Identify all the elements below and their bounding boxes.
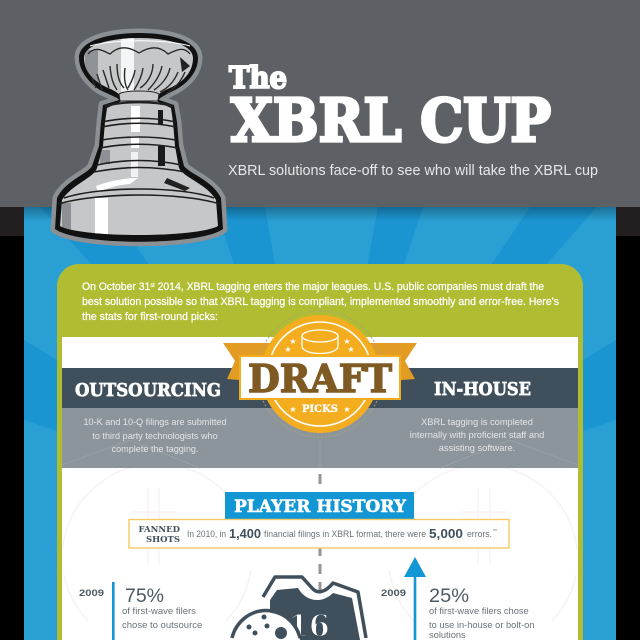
intro text: st — [150, 283, 155, 289]
stars — [284, 337, 355, 354]
stat: 25 percent: solutions — [429, 630, 466, 640]
outsourcing description — [83, 417, 227, 454]
intro text: the stats for first-round picks: — [82, 311, 218, 323]
in-house description — [410, 417, 544, 453]
heading: player history: PLAYER HISTORY — [234, 497, 407, 517]
callout: fanned shots: In 2010, in — [187, 529, 226, 540]
title: The — [229, 61, 287, 96]
ribbon tails — [223, 343, 417, 382]
stars: ★ — [347, 345, 355, 354]
in-house description: internally with proficient staff and — [410, 430, 544, 440]
puck — [302, 330, 338, 354]
callout: fanned shots: 1,400 — [229, 526, 261, 541]
heading: in-house: IN-HOUSE — [434, 380, 531, 400]
title — [229, 61, 551, 155]
arrow: right blue — [404, 557, 426, 640]
blue ray background — [24, 207, 616, 640]
stat: 25 percent: 2009 — [381, 588, 406, 599]
outsourcing description: to third party technologists who — [92, 431, 218, 441]
outsourcing description: complete the tagging. — [112, 444, 198, 454]
stat: 75 percent: 2009 — [79, 588, 104, 599]
band: dark heading — [62, 368, 578, 408]
picks word: ★ — [343, 405, 351, 414]
icon: silver trophy cup — [55, 33, 223, 242]
dark side strips — [0, 207, 640, 236]
badge: draft picks — [223, 311, 417, 437]
icon: jersey and puck — [232, 577, 366, 640]
stat: 75 percent — [79, 586, 202, 631]
callout: fanned shots: ** — [493, 529, 497, 535]
band: gray description — [62, 408, 578, 468]
subtitle: XBRL solutions face-off to see who will take the XBRL cup — [228, 163, 598, 179]
stat: 25 percent: 25% — [429, 586, 469, 607]
draft word: DRAFT — [248, 356, 392, 401]
stat: 25 percent: to use in-house or bolt-on — [429, 620, 534, 630]
heading: player history — [225, 492, 414, 519]
stat: 75 percent: of first-wave filers — [122, 606, 196, 617]
heading: outsourcing: OUTSOURCING — [75, 381, 221, 401]
title: XBRL CUP — [231, 86, 551, 155]
header band — [0, 0, 640, 207]
stars: ★ — [284, 345, 292, 354]
stat: 25 percent — [381, 586, 534, 640]
outsourcing description: 10-K and 10-Q filings are submitted — [83, 417, 227, 427]
callout: fanned shots: financial filings in XBRL format, there were — [264, 529, 426, 540]
dashed center line — [318, 474, 322, 592]
badge circle — [257, 311, 383, 437]
picks word: ★ — [289, 405, 297, 414]
panel: green intro — [57, 264, 583, 640]
callout: fanned shots: 5,000 — [429, 526, 463, 541]
stat: 25 percent: of first-wave filers chose — [429, 606, 529, 616]
intro text — [82, 281, 559, 323]
rink markings — [62, 464, 577, 621]
picks word — [289, 404, 351, 415]
stars: ★ — [289, 337, 297, 346]
callout: fanned shots: errors. — [467, 529, 492, 540]
bar: left blue — [112, 582, 115, 640]
in-house description: XBRL tagging is completed — [421, 417, 533, 427]
stat: 75 percent: chose to outsource — [122, 620, 202, 631]
panel: white content — [62, 337, 578, 640]
picks word: PICKS — [302, 404, 338, 415]
intro text: best solution possible so that XBRL tagging is compliant, implemented smoothly and error-free. Here's — [82, 296, 559, 308]
intro text: 2014, XBRL tagging enters the major leagues. U.S. public companies must draft the — [155, 281, 544, 293]
stat: 75 percent: 75% — [125, 586, 164, 607]
plaque — [240, 356, 400, 399]
intro text: On October 31 — [82, 281, 154, 293]
stars: ★ — [343, 337, 351, 346]
in-house description: assisting software. — [439, 443, 515, 453]
callout: fanned shots: FANNED — [138, 525, 181, 535]
callout: fanned shots — [129, 520, 509, 548]
callout: fanned shots: SHOTS — [146, 535, 180, 545]
